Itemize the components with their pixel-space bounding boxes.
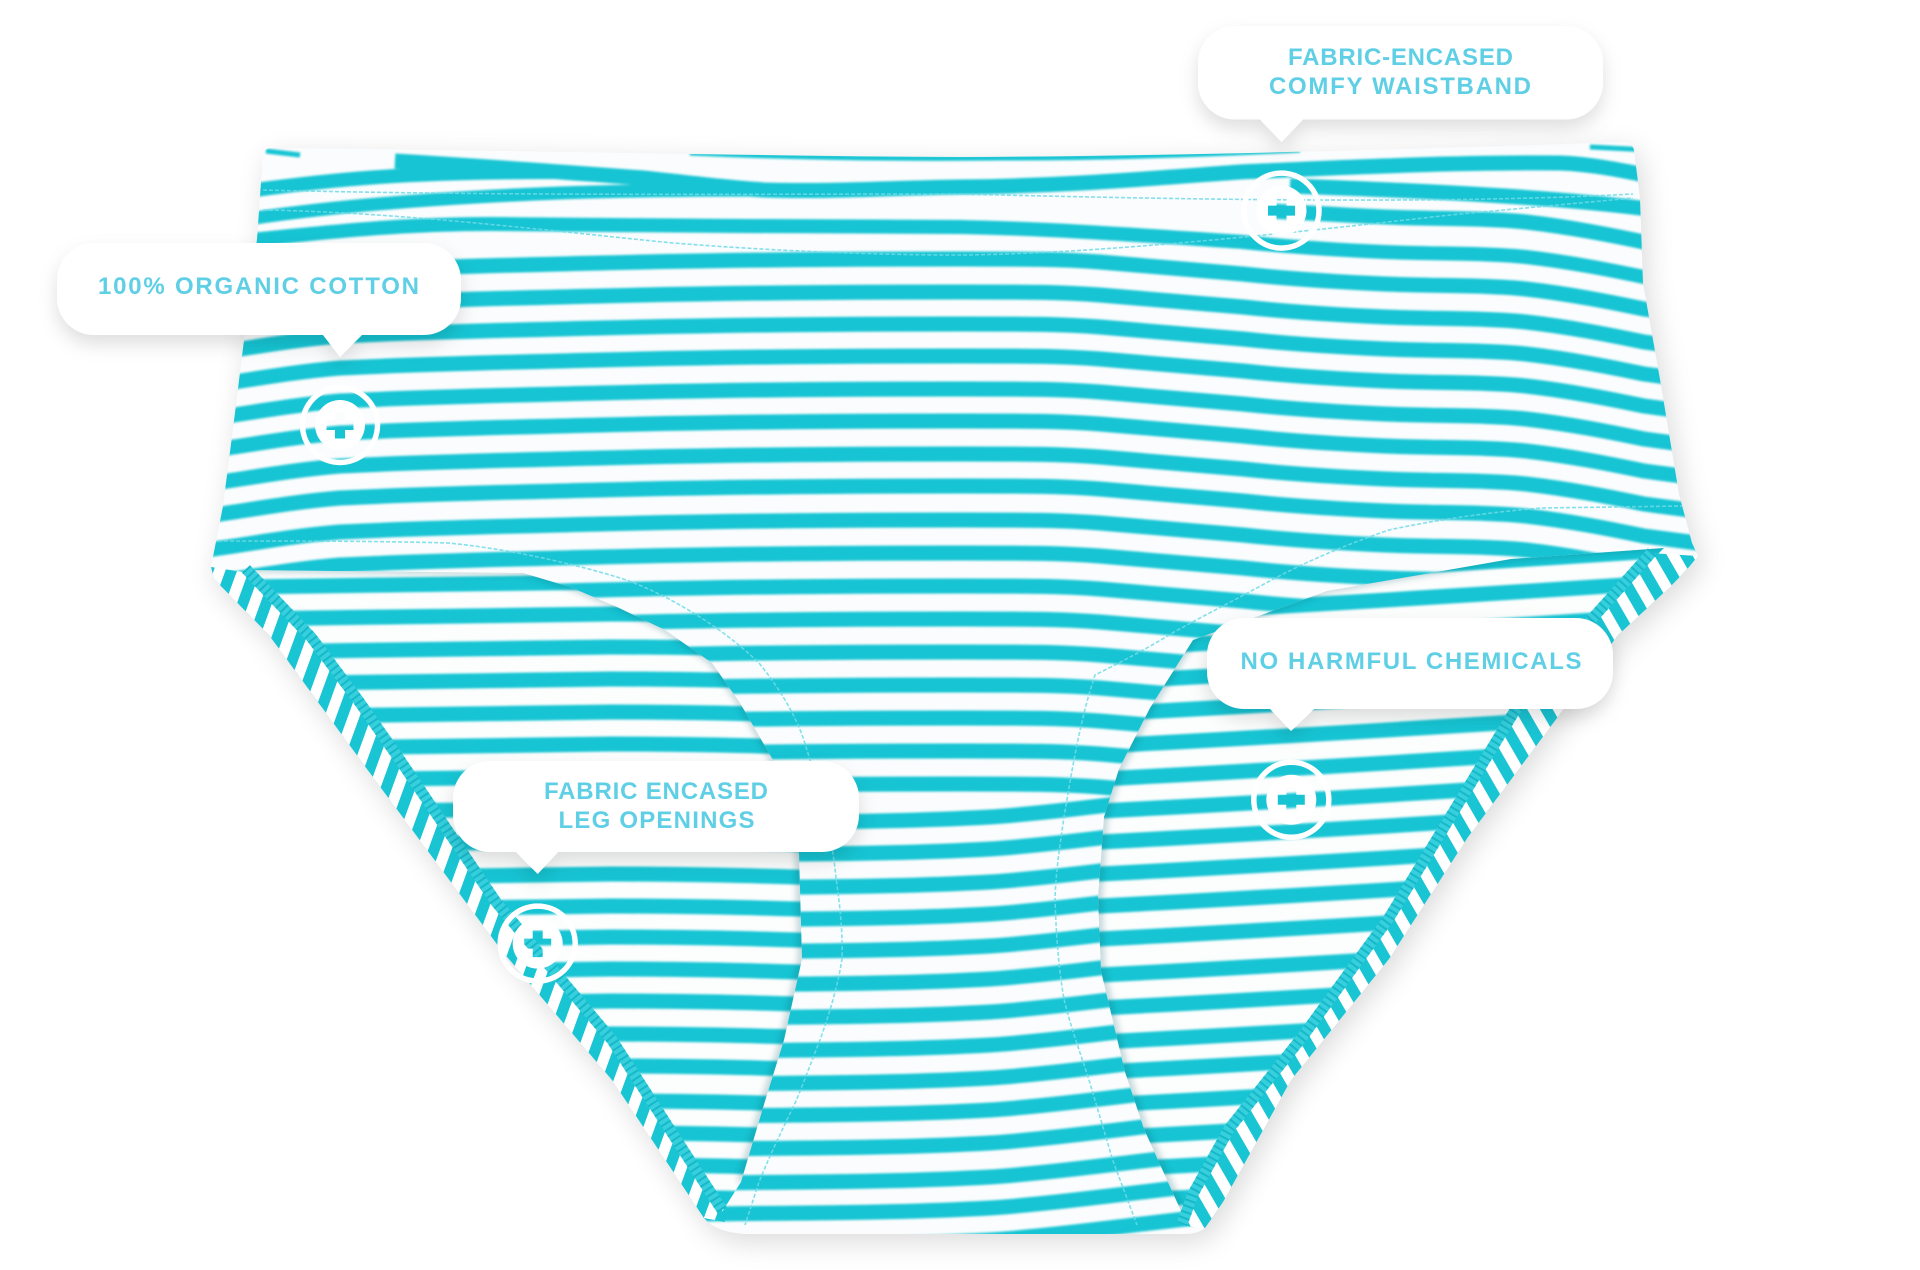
right binding stripes — [1186, 553, 1698, 1228]
callout: fabric-encased comfy waistband: COMFY WAISTBAND — [1269, 73, 1531, 100]
callout: fabric encased leg openings: LEG OPENINGS — [558, 807, 754, 834]
marker: waistband — [1244, 173, 1319, 248]
right leg opening panel — [1098, 548, 1664, 1210]
marker: no harmful chemicals — [1254, 762, 1329, 837]
callout: no harmful chemicals — [1207, 618, 1613, 731]
garment drop shadow — [216, 150, 1703, 1242]
left leg opening panel — [254, 570, 802, 1212]
callout: fabric encased leg openings: FABRIC ENCASED — [544, 778, 768, 805]
marker: organic cotton — [302, 388, 378, 462]
stitching lines — [218, 190, 1684, 1225]
callout: 100% organic cotton — [57, 243, 461, 357]
callout: no harmful chemicals: NO HARMFUL CHEMICALS — [1240, 648, 1582, 675]
marker: leg openings — [500, 906, 575, 981]
right leg seam — [1182, 552, 1652, 1224]
callout: fabric encased leg openings — [453, 761, 859, 874]
left binding stripes — [211, 567, 725, 1222]
striped underwear garment — [180, 130, 1720, 1250]
left leg seam — [246, 569, 722, 1210]
callout: fabric-encased comfy waistband: FABRIC-ENCASED — [1288, 44, 1513, 71]
callout: fabric-encased comfy waistband — [1198, 26, 1603, 142]
front body with stripes — [180, 130, 1720, 1250]
callout: 100% organic cotton: 100% ORGANIC COTTON — [98, 273, 419, 300]
